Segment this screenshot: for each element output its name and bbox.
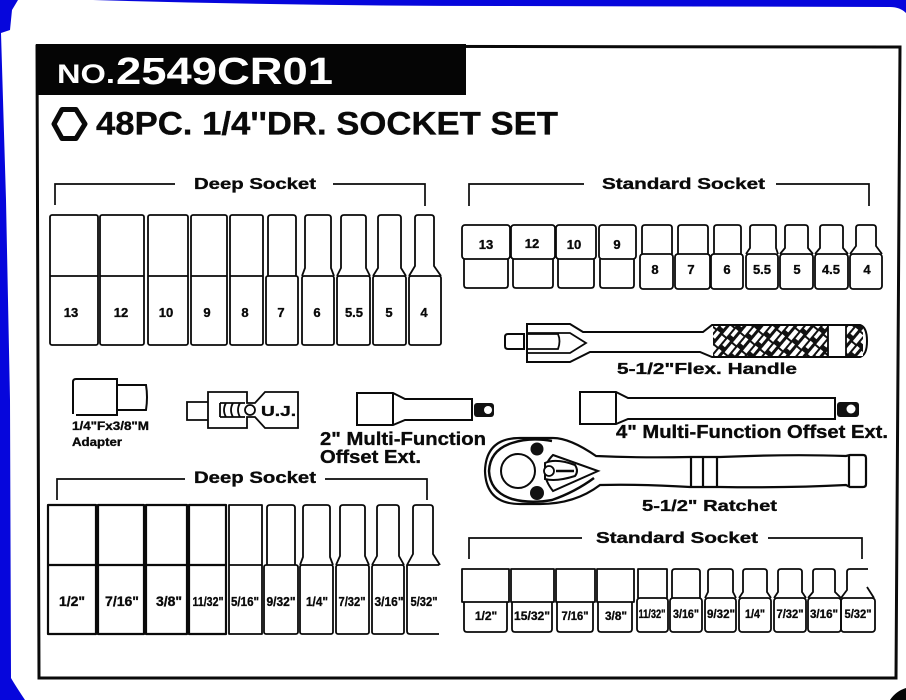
socket 11/32: 11/32" — [192, 594, 224, 609]
socket 3/16: 3/16" — [673, 607, 699, 621]
socket 10 — [556, 225, 596, 288]
socket 5/16: 5/16" — [231, 594, 259, 609]
socket 12: 12 — [525, 236, 539, 251]
label: 2 inch offset extension — [320, 429, 486, 467]
socket 5/32: 5/32" — [844, 607, 872, 621]
socket 13 — [50, 215, 98, 345]
socket 5/32 — [407, 505, 440, 634]
socket 12 — [100, 215, 144, 345]
label: 4 inch offset extension: 4" Multi-Function Offset Ext. — [616, 422, 888, 442]
socket 3/16 — [808, 569, 841, 632]
socket 3/16: 3/16" — [374, 594, 404, 609]
socket 9/32 — [705, 569, 736, 632]
tool: universal joint — [187, 392, 298, 428]
socket 7 — [675, 225, 710, 289]
socket 15/32: 15/32" — [514, 609, 550, 623]
socket 7: 7 — [277, 305, 285, 320]
header: model number — [36, 44, 466, 95]
socket 8: 8 — [241, 305, 249, 320]
socket 12 — [511, 225, 555, 288]
socket 15/32 — [511, 569, 554, 632]
socket 3/8 — [146, 505, 187, 634]
black corner — [890, 688, 906, 700]
socket 4 — [850, 225, 882, 289]
socket 3/16 — [670, 569, 702, 632]
socket 3/8: 3/8" — [156, 593, 182, 609]
socket 1/2: 1/2" — [475, 609, 497, 623]
socket 7/16 — [98, 505, 144, 634]
title with hexagon icon: 48PC. 1/4''DR. SOCKET SET — [96, 106, 558, 142]
socket 7: 7 — [687, 262, 695, 277]
socket 9/32: 9/32" — [266, 594, 296, 609]
socket 3/16 — [372, 505, 404, 634]
socket 9: 9 — [203, 305, 211, 320]
tool: adapter — [73, 379, 147, 415]
socket 9/32 — [264, 505, 298, 634]
tool: ratchet — [485, 438, 866, 504]
socket 6 — [302, 215, 334, 345]
socket 10: 10 — [159, 305, 173, 320]
socket 12: 12 — [114, 305, 128, 320]
socket 5/32 — [841, 569, 875, 632]
socket 11/32: 11/32" — [638, 607, 666, 621]
socket 4: 4 — [863, 262, 871, 277]
socket 4 — [409, 215, 441, 345]
socket 13: 13 — [64, 305, 78, 320]
socket 1/2 — [462, 569, 509, 632]
socket 8 — [230, 215, 263, 345]
socket 9 — [599, 225, 636, 288]
tool: flex handle — [505, 324, 867, 362]
socket 6: 6 — [723, 262, 731, 277]
socket 8 — [640, 225, 673, 289]
socket 5: 5 — [385, 305, 393, 320]
panel: deep socket inch — [48, 468, 440, 634]
socket 7/32: 7/32" — [776, 607, 804, 621]
heading bracket: deep socket — [55, 176, 425, 206]
header: model number: 2549CR01 — [116, 51, 333, 93]
socket 1/4 — [739, 569, 771, 632]
heading bracket: deep socket: Deep Socket — [194, 176, 317, 193]
socket 4: 4 — [420, 305, 428, 320]
socket 5.5 — [337, 215, 370, 345]
label: adapter — [72, 419, 149, 449]
header: model number: NO. — [57, 59, 115, 89]
socket 7/16: 7/16" — [562, 609, 588, 623]
heading bracket: standard socket: Standard Socket — [596, 530, 759, 547]
socket 8: 8 — [651, 262, 659, 277]
label: 2 inch offset extension: Offset Ext. — [320, 447, 421, 467]
socket 3/16: 3/16" — [810, 607, 838, 621]
socket 5.5: 5.5 — [753, 262, 771, 277]
socket 1/2 — [48, 505, 96, 634]
socket 4.5: 4.5 — [822, 262, 840, 277]
socket 3/8 — [597, 569, 634, 632]
heading bracket: deep socket — [57, 468, 427, 500]
socket 9: 9 — [613, 237, 621, 252]
socket 7/32: 7/32" — [338, 594, 366, 609]
socket 5.5 — [746, 225, 778, 289]
heading bracket: deep socket: Deep Socket — [194, 468, 316, 487]
heading bracket: standard socket — [469, 530, 862, 559]
socket 7/32 — [336, 505, 369, 634]
socket 1/4: 1/4" — [745, 607, 765, 621]
panel: deep socket metric — [50, 176, 441, 345]
heading bracket: standard socket: Standard Socket — [602, 176, 766, 193]
socket 5/16 — [229, 505, 262, 634]
label: adapter: Adapter — [72, 435, 122, 449]
socket 9 — [191, 215, 227, 345]
socket 7/32 — [774, 569, 806, 632]
socket 5.5: 5.5 — [345, 305, 363, 320]
socket 6 — [711, 225, 743, 289]
socket 5/32: 5/32" — [410, 594, 438, 609]
socket 1/2: 1/2" — [59, 593, 85, 609]
tool: universal joint: U.J. — [261, 403, 296, 420]
socket 13: 13 — [479, 237, 493, 252]
socket 11/32 — [637, 569, 668, 632]
panel: standard socket metric — [462, 176, 882, 289]
socket 9/32: 9/32" — [707, 607, 735, 621]
socket 10: 10 — [567, 237, 581, 252]
socket 5: 5 — [793, 262, 801, 277]
label: ratchet: 5-1/2" Ratchet — [642, 498, 778, 515]
tool: 2 inch offset extension — [357, 393, 494, 425]
socket 1/4: 1/4" — [306, 594, 328, 609]
socket 3/8: 3/8" — [605, 609, 627, 623]
heading bracket: standard socket — [469, 176, 869, 206]
socket 5 — [780, 225, 813, 289]
socket 7 — [266, 215, 298, 345]
label: flex handle: 5-1/2"Flex. Handle — [617, 361, 797, 378]
socket 7/16 — [556, 569, 595, 632]
label: 2 inch offset extension: 2" Multi-Function — [320, 429, 486, 449]
socket 6: 6 — [313, 305, 321, 320]
label: adapter: 1/4"Fx3/8"M — [72, 419, 149, 433]
socket 10 — [148, 215, 188, 345]
socket 5 — [373, 215, 406, 345]
socket 4.5 — [815, 225, 848, 289]
panel: standard socket inch — [462, 530, 875, 632]
socket 7/16: 7/16" — [105, 593, 139, 609]
socket 13 — [462, 225, 510, 288]
socket 1/4 — [300, 505, 333, 634]
socket 11/32 — [189, 505, 226, 634]
tool: 4 inch offset extension — [580, 392, 859, 424]
